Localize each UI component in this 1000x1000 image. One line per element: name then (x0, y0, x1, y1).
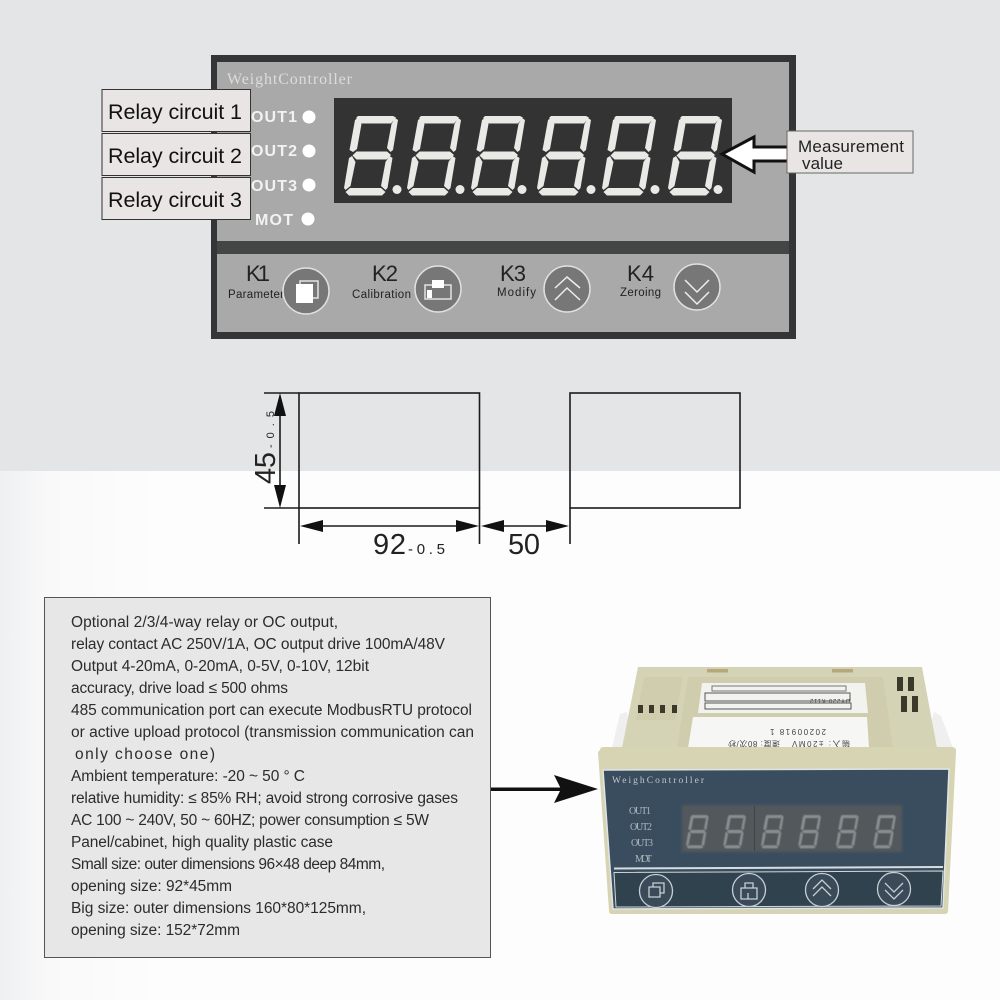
callout: relay circuit 1: Relay circuit 1 (108, 100, 242, 124)
status indicators: OUT1 (251, 109, 297, 126)
callout: relay circuit 1 (102, 90, 250, 132)
key K2 calibration (352, 261, 461, 312)
panel: specifications text: opening size: 92*45mm (71, 878, 232, 895)
label: height 45: -0.5 (265, 411, 277, 448)
seven-segment display (334, 98, 732, 203)
key K2 calibration: K2 (372, 261, 398, 286)
key K4 zeroing: K4 (627, 261, 654, 286)
key K3 modify: Modify (497, 287, 536, 299)
key K3 modify (497, 261, 590, 312)
wiring label (698, 683, 868, 713)
brand label: WeightController (227, 71, 353, 88)
status labels (629, 806, 653, 865)
status labels: OUT3 (631, 838, 653, 849)
top vents (638, 677, 918, 713)
panel: specifications text: relative humidity: ≤ 85% RH; avoid strong corrosive gases (71, 790, 458, 807)
status labels: OUT1 (629, 806, 651, 817)
front buttons (640, 872, 910, 908)
panel: specifications text: Output 4-20mA, 0-20mA, 0-5V, 0-10V, 12bit (71, 658, 370, 675)
panel: specifications text: opening size: 152*72mm (71, 922, 240, 939)
panel: specifications text: only choose one) (75, 746, 215, 763)
callout: measurement value (787, 131, 913, 173)
spec label: 速度: 80次/秒 (728, 739, 780, 749)
spec label: 输入: ±20MV (791, 739, 850, 749)
display (682, 805, 902, 852)
panel: specifications text: AC 100 ~ 240V, 50 ~ 60HZ; power consumption ≤ 5W (71, 812, 429, 829)
panel: specifications text: accuracy, drive load ≤ 500 ohms (71, 680, 288, 697)
key K2 calibration: Calibration (352, 289, 411, 301)
panel: specifications text: relay contact AC 250V/1A, OC output drive 100mA/48V (71, 636, 446, 653)
front face (603, 769, 949, 909)
label: width 92: -0.5 (408, 541, 445, 558)
panel: controller front diagram (211, 55, 796, 339)
panel: specifications text: Big size: outer dimensions 160*80*125mm, (71, 900, 366, 917)
arrow: to display (722, 137, 788, 172)
callout: measurement value: value (802, 154, 843, 173)
callout: relay circuit 3: Relay circuit 3 (108, 188, 242, 212)
key K4 zeroing (620, 261, 720, 310)
label: height 45: 45 (250, 452, 282, 484)
key K3 modify: K3 (500, 261, 526, 286)
callout: measurement value: Measurement (798, 137, 904, 156)
status labels: MOT (635, 854, 652, 865)
panel: specifications text: Panel/cabinet, high quality plastic case (71, 834, 333, 851)
panel: specifications text (44, 598, 490, 958)
panel: specifications text: Optional 2/3/4-way relay or OC output, (71, 614, 338, 631)
spec label: 20200918 1 (769, 727, 826, 736)
side clips (612, 712, 953, 748)
label: width 92: 92 (373, 529, 406, 561)
key K1 parameter: K1 (246, 261, 270, 286)
key K1 parameter (228, 261, 329, 314)
spec label (688, 717, 869, 749)
divider line (614, 866, 943, 870)
wiring label: DY220-K112 (809, 697, 850, 703)
status indicators: OUT3 (251, 178, 297, 195)
chart: cut-out dimension drawing (250, 393, 740, 561)
callout: relay circuit labels (102, 90, 250, 220)
panel: specifications text: Ambient temperature: -20 ~ 50 ° C (71, 768, 305, 785)
status indicators (251, 109, 316, 229)
key K4 zeroing: Zeroing (620, 287, 661, 299)
label: height 45 (250, 411, 282, 484)
callout: relay circuit 2 (102, 134, 250, 176)
status indicators: MOT (255, 212, 293, 229)
status labels: OUT2 (630, 822, 652, 833)
label: width 92 (373, 529, 445, 561)
label: gap 50: 50 (508, 529, 540, 561)
housing front (598, 747, 956, 914)
panel: specifications text: Small size: outer dimensions 96×48 deep 84mm, (71, 856, 385, 873)
arrow: specifications to product (491, 775, 598, 803)
housing top (622, 667, 937, 748)
status indicators: OUT2 (251, 143, 297, 160)
button strip background (614, 871, 943, 907)
brand: WeighController (612, 776, 705, 786)
key K1 parameter: Parameter (228, 289, 284, 301)
callout: relay circuit 2: Relay circuit 2 (108, 144, 242, 168)
product photo: controller (598, 667, 956, 914)
panel: specifications text: 485 communication port can execute ModbusRTU protocol (71, 702, 472, 719)
panel: specifications text: or active upload protocol (transmission communication can (71, 724, 474, 741)
callout: relay circuit 3 (102, 178, 250, 220)
